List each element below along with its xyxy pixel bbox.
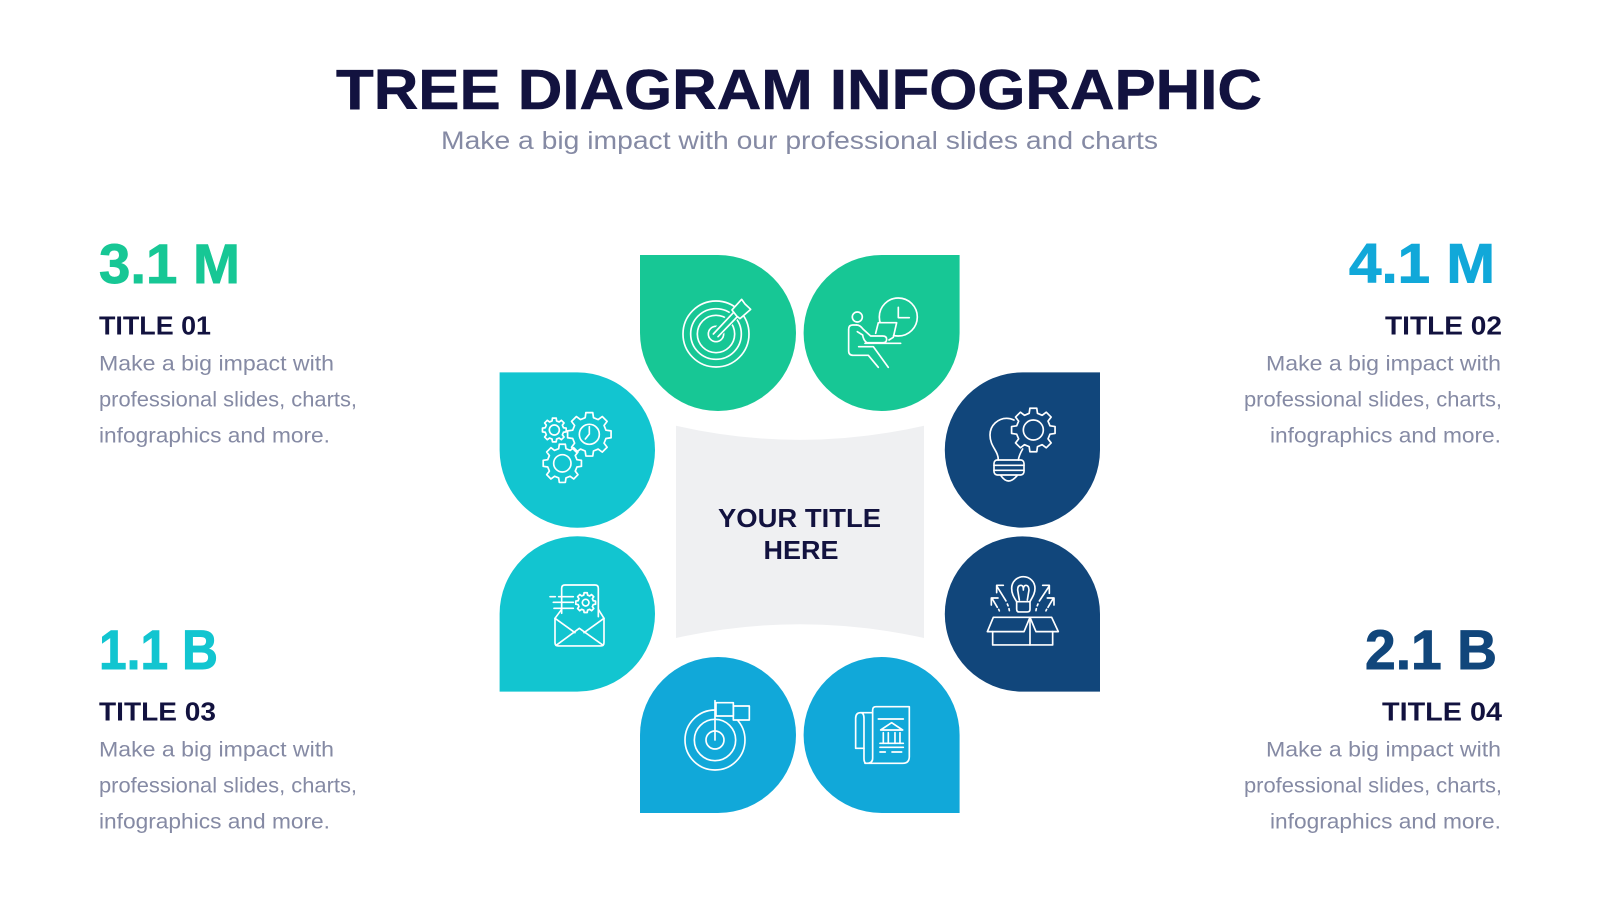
petal: blue right [804, 657, 960, 813]
stat description 02: professional slides, charts, [1244, 388, 1502, 411]
petal: green right [804, 255, 960, 411]
icon: light bulb with gear [990, 408, 1055, 481]
stat description 03: infographics and more. [99, 811, 330, 834]
stat value 2.1 B: 2.1 B [1365, 618, 1497, 681]
icon: target with flags [685, 701, 749, 770]
panel: stat 02 [1244, 232, 1502, 447]
center title: HERE [764, 535, 838, 565]
petal: green left [640, 255, 796, 411]
panel: stat 03 [99, 618, 357, 834]
petal: teal lower [500, 536, 655, 692]
subtitle: Make a big impact with our professional slides and charts [441, 127, 1158, 155]
stat title 02: TITLE 02 [1385, 310, 1502, 340]
petal: navy upper [945, 372, 1100, 528]
stat value 3.1 M: 3.1 M [99, 232, 240, 295]
stat description 01: Make a big impact with [99, 352, 334, 375]
icon: gears with clock [542, 413, 611, 482]
icon: document with bank [856, 707, 909, 763]
petal: teal upper [500, 372, 655, 528]
stat description 03 [99, 739, 357, 834]
stat description 01 [99, 352, 357, 447]
panel: stat 04 [1244, 618, 1503, 834]
stat title 03: TITLE 03 [99, 697, 216, 727]
stat description 04: infographics and more. [1270, 811, 1501, 834]
center title [718, 503, 881, 565]
stat description 02: infographics and more. [1270, 424, 1501, 447]
title: TREE DIAGRAM INFOGRAPHIC [336, 58, 1262, 122]
stat description 02 [1244, 352, 1502, 447]
center title: YOUR TITLE [718, 503, 881, 533]
icon: person at laptop with clock [849, 298, 917, 367]
stat description 01: infographics and more. [99, 424, 330, 447]
stat description 04 [1244, 739, 1502, 834]
stat description 02: Make a big impact with [1266, 352, 1501, 375]
stat value 4.1 M: 4.1 M [1349, 232, 1495, 295]
stat title 04: TITLE 04 [1382, 697, 1503, 727]
stat description 04: professional slides, charts, [1244, 775, 1502, 798]
stat description 03: Make a big impact with [99, 739, 334, 762]
icon: box with idea bulb [987, 577, 1058, 645]
icon: envelope with gear document [550, 585, 604, 646]
petal: navy lower [945, 536, 1100, 692]
panel: stat 01 [99, 232, 357, 447]
stat description 03: professional slides, charts, [99, 775, 357, 798]
icon: target with arrow [683, 299, 751, 367]
stat value 1.1 B: 1.1 B [99, 618, 218, 681]
petal: blue left [640, 657, 796, 813]
stat description 04: Make a big impact with [1266, 739, 1501, 762]
center panel [676, 426, 924, 638]
stat description 01: professional slides, charts, [99, 388, 357, 411]
stat title 01: TITLE 01 [99, 310, 211, 340]
